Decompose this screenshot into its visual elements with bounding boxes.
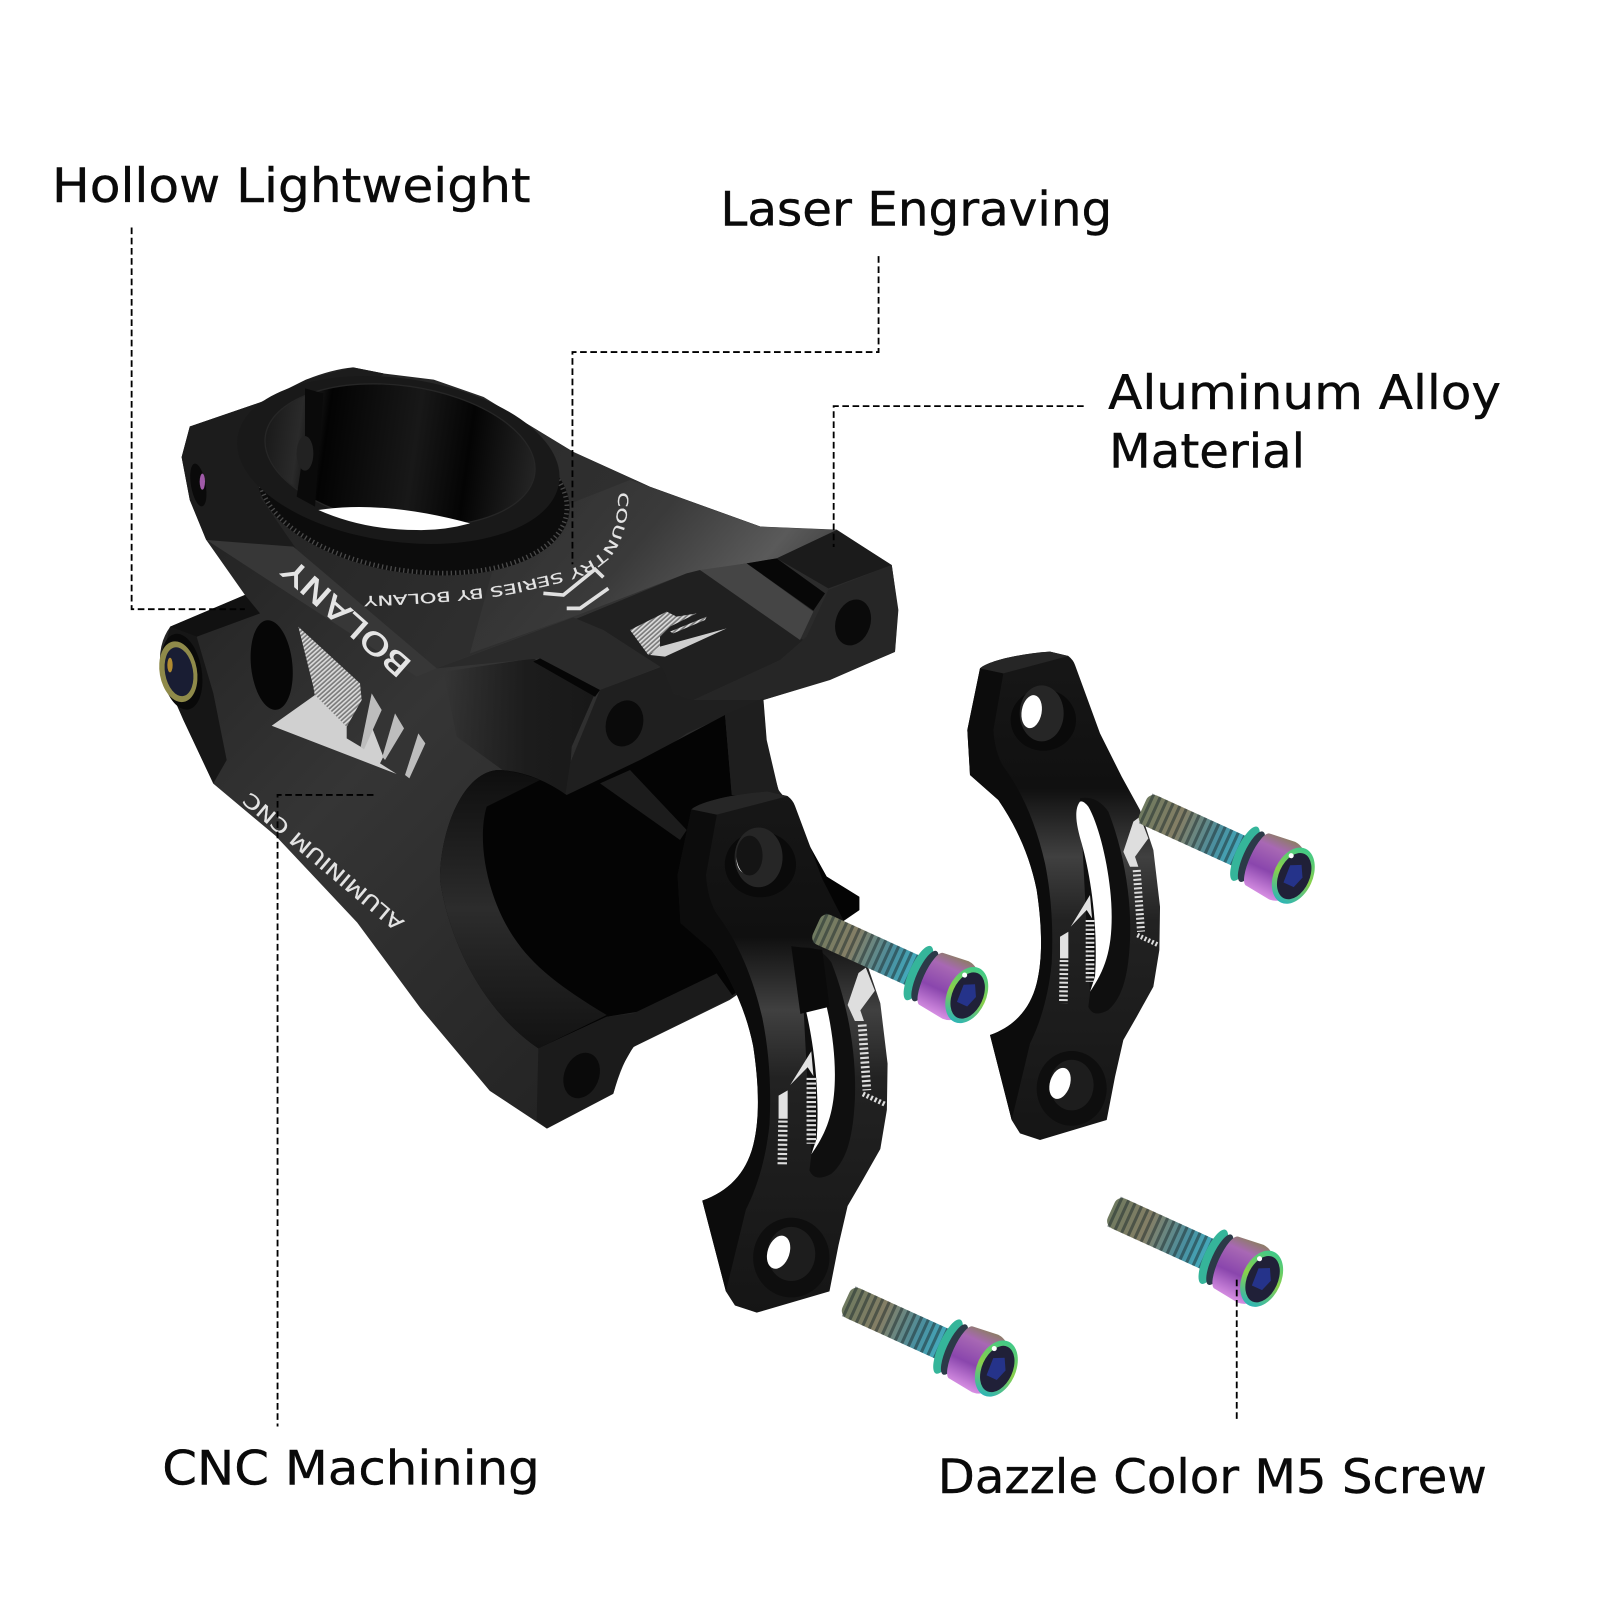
logo on cross bar [630,612,727,657]
side lobe holes and bolt [155,462,297,713]
label: Laser Engraving: Laser Engraving [720,183,1112,238]
screw front [803,898,998,1032]
threaded holes in stem [557,595,877,1104]
engraved brand BOLANY: BOLANY [275,552,418,683]
clamp plate right [967,652,1160,1140]
label: Hollow Lightweight: Hollow Lightweight [52,159,531,214]
label: Aluminum Alloy Material: Material [1109,424,1305,479]
dazzle bolt in stem side [155,638,202,705]
stem body [160,367,898,1129]
label: Aluminum Alloy Material: Aluminum Alloy [1108,366,1501,421]
label: Dazzle Color M5 Screw: Dazzle Color M5 Screw [938,1450,1487,1505]
product: bike stem with clamps and screws [159,367,1315,1397]
label: CNC Machining: CNC Machining [162,1442,540,1497]
engraved text ALUMINIUM CNC: ALUMINIUM CNC [239,788,408,935]
side detail in crop coordinates [160,540,595,795]
engraved arc text: COUNTRY SERIES BY BOLANY [364,493,628,606]
screw lower right [1098,1181,1292,1316]
bar clamp ring [226,357,581,594]
leader lines [132,228,1237,1427]
screw lower left [833,1271,1027,1405]
chevron mark near arc text [543,569,608,608]
cross bar and front blocks [437,480,898,797]
chevron graphic on side [272,627,425,778]
clamp plate front [678,792,888,1313]
screw top right [1130,778,1324,913]
front opening [440,698,859,1128]
